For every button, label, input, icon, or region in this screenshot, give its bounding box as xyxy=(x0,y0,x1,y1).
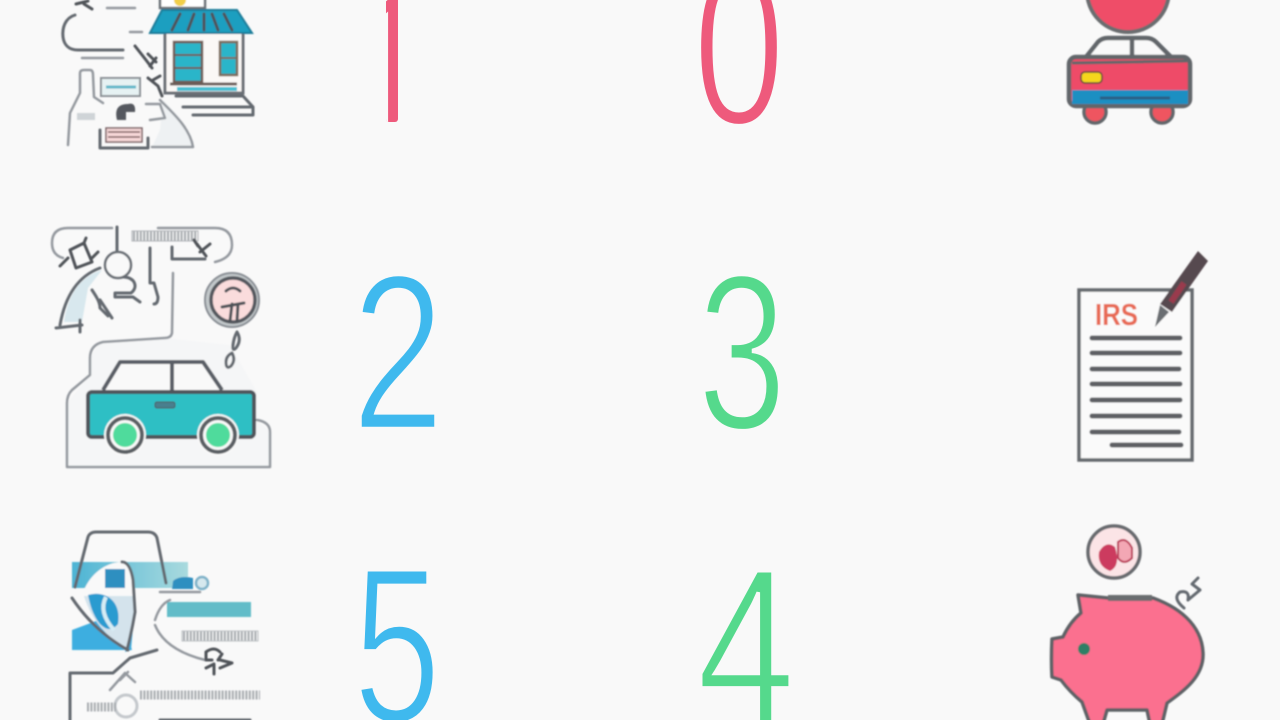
icon: IRS form with pen xyxy=(1079,251,1208,460)
icon: storefront and hand at register xyxy=(63,0,253,148)
icon: red car with coin on top xyxy=(1069,0,1190,123)
number three: 3 xyxy=(698,228,786,476)
number two: 2 xyxy=(352,228,444,477)
icon: chart with gears and blue swoosh xyxy=(70,532,260,720)
form lines xyxy=(1092,338,1181,445)
icon: piggy bank with coin xyxy=(1052,526,1203,720)
form heading: IRS xyxy=(1095,297,1138,332)
icon: teal car with gauge and diagram xyxy=(52,227,270,467)
